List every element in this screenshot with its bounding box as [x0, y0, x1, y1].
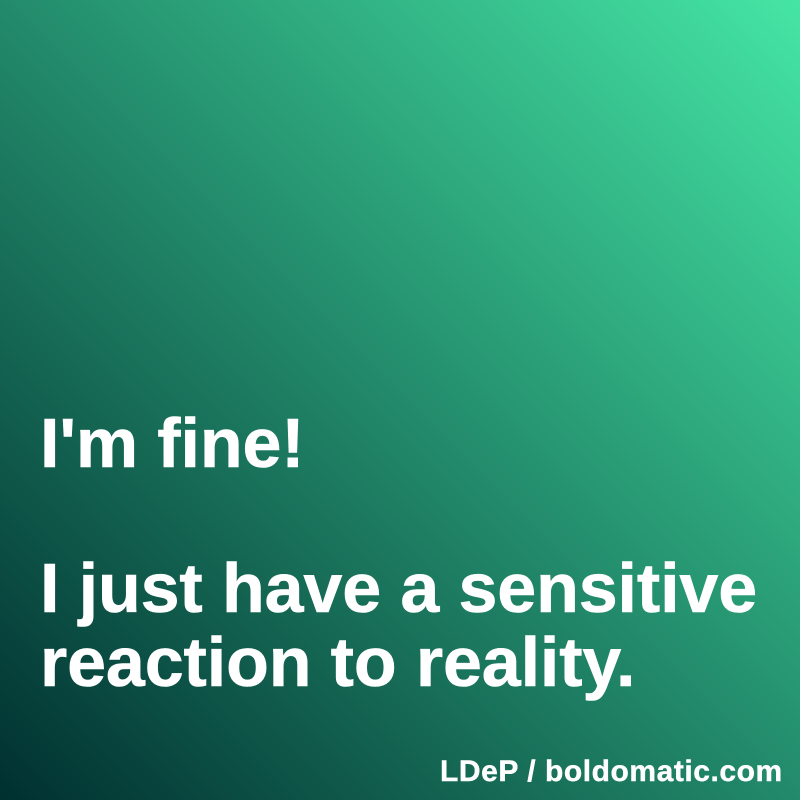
text line: reaction to reality.: reaction to reality. [40, 623, 635, 701]
text line: I just have a sensitive: I just have a sensitive [40, 549, 757, 627]
watermark: LDeP / boldomatic.com: LDeP / boldomatic.com [440, 755, 783, 788]
heading: I'm fine!: I'm fine! [40, 404, 304, 482]
